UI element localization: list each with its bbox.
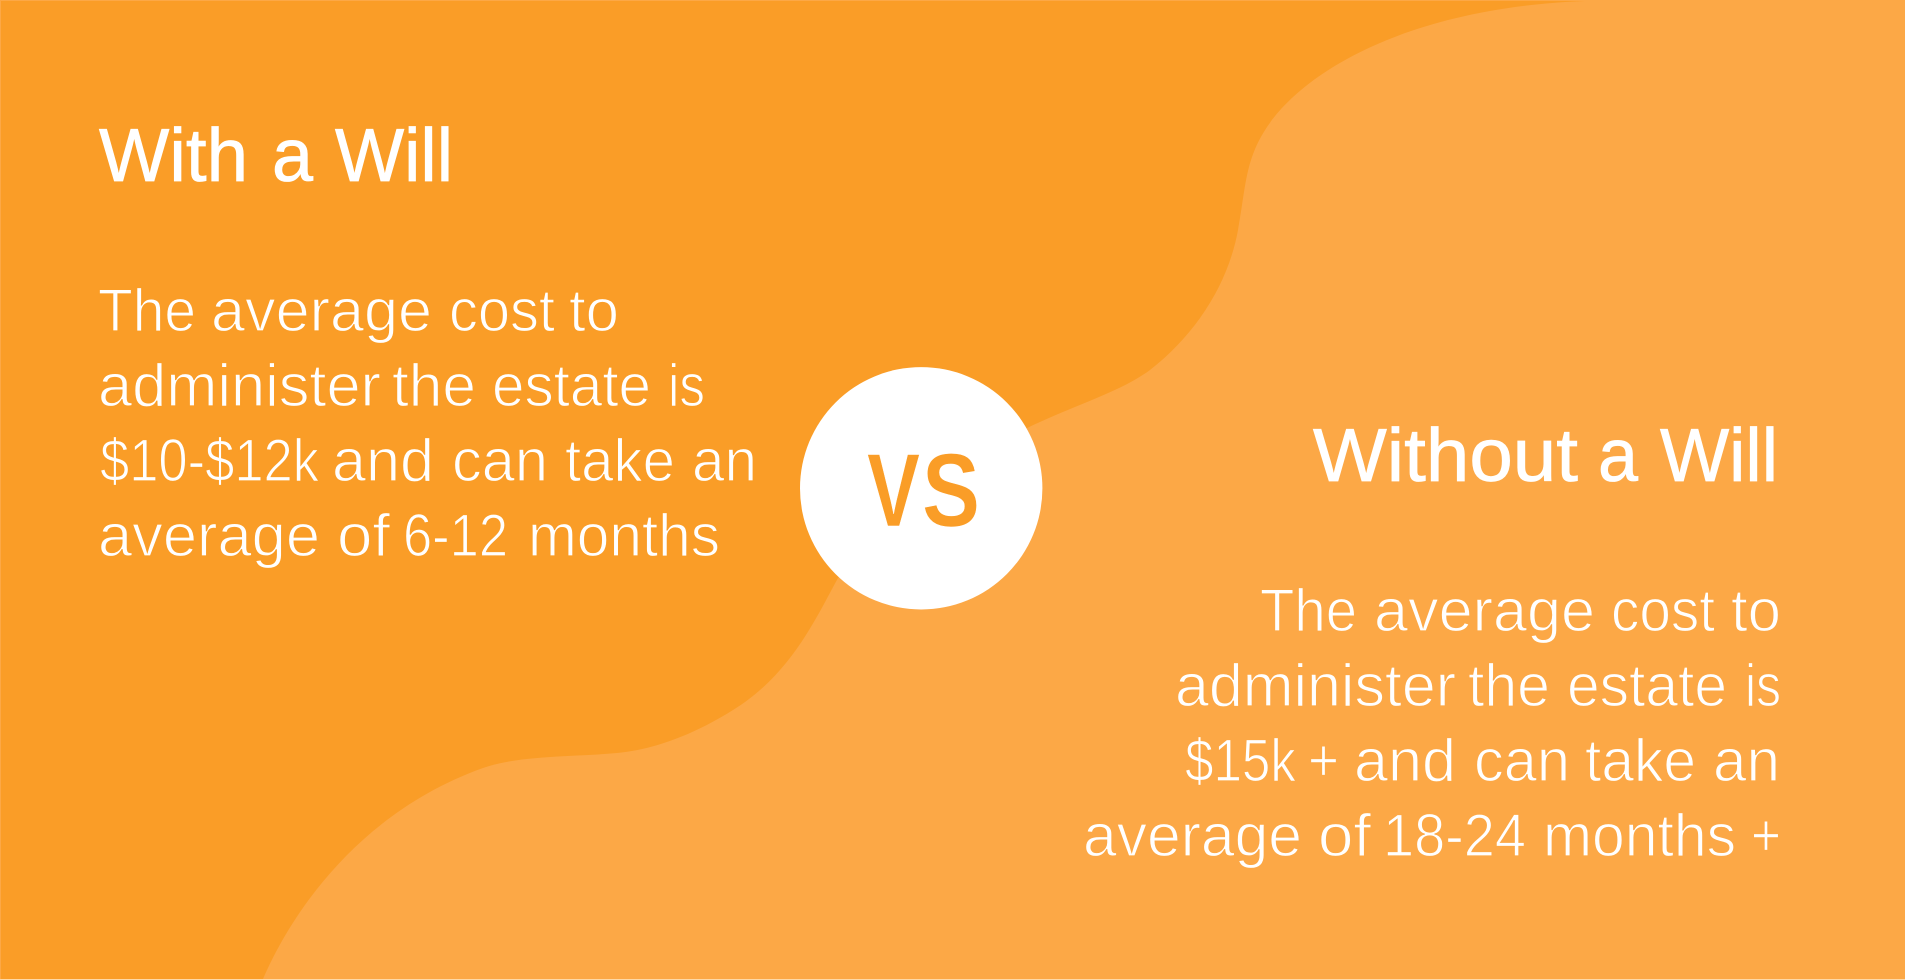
text block: with a will details: the xyxy=(392,352,476,419)
text block: with a will details: The xyxy=(98,277,196,344)
text block: with a will details: of xyxy=(337,502,390,569)
text block: without a will details: is xyxy=(1745,652,1781,719)
text block: without a will details: estate xyxy=(1567,652,1727,719)
text block: with a will details: is xyxy=(668,352,705,419)
badge label: V xyxy=(867,433,920,549)
heading: with a will: a xyxy=(272,113,313,197)
heading: with a will: Will xyxy=(335,113,453,197)
badge label: S xyxy=(922,433,980,549)
text block: without a will details: administer xyxy=(1175,652,1456,719)
heading: without a will: Without xyxy=(1313,413,1578,497)
text block: without a will details: 18-24 xyxy=(1383,802,1526,869)
text block: without a will details: + xyxy=(1308,727,1339,794)
text block: with a will details: $10-$12k xyxy=(100,427,320,494)
text block: with a will details: average xyxy=(211,277,432,344)
badge circle xyxy=(800,367,1042,610)
text block: with a will details: estate xyxy=(492,352,651,419)
text block: without a will details: can xyxy=(1474,727,1570,794)
text block: without a will details: and xyxy=(1354,727,1456,794)
badge label xyxy=(867,433,980,549)
text block: with a will details: 6-12 xyxy=(403,502,508,569)
text block: with a will details xyxy=(98,277,757,569)
text block: with a will details: and xyxy=(332,427,434,494)
text block: without a will details: take xyxy=(1585,727,1696,794)
text block: without a will details: average xyxy=(1374,577,1595,644)
text block: with a will details: an xyxy=(692,427,757,494)
text block: without a will details: $15k xyxy=(1185,727,1297,794)
text block: with a will details: administer xyxy=(98,352,381,419)
text block: without a will details: average xyxy=(1083,802,1302,869)
heading: with a will: With xyxy=(99,113,248,197)
heading: with a will xyxy=(99,113,453,197)
text block: with a will details: can xyxy=(452,427,548,494)
text block: without a will details: + xyxy=(1751,802,1781,869)
text block: without a will details: to xyxy=(1731,577,1781,644)
text block: with a will details: cost xyxy=(449,277,555,344)
heading: without a will: a xyxy=(1598,413,1638,497)
text block: without a will details: months xyxy=(1543,802,1736,869)
text block: without a will details: of xyxy=(1318,802,1371,869)
text block: with a will details: take xyxy=(565,427,675,494)
text block: without a will details xyxy=(1083,577,1781,869)
vs badge xyxy=(800,367,1042,610)
heading: without a will: Will xyxy=(1660,413,1778,497)
text block: without a will details: the xyxy=(1468,652,1550,719)
heading: without a will xyxy=(1313,413,1778,497)
text block: with a will details: months xyxy=(528,502,720,569)
text block: with a will details: to xyxy=(569,277,619,344)
text block: without a will details: The xyxy=(1260,577,1357,644)
text block: without a will details: cost xyxy=(1611,577,1715,644)
text block: without a will details: an xyxy=(1713,727,1780,794)
text block: with a will details: average xyxy=(98,502,320,569)
